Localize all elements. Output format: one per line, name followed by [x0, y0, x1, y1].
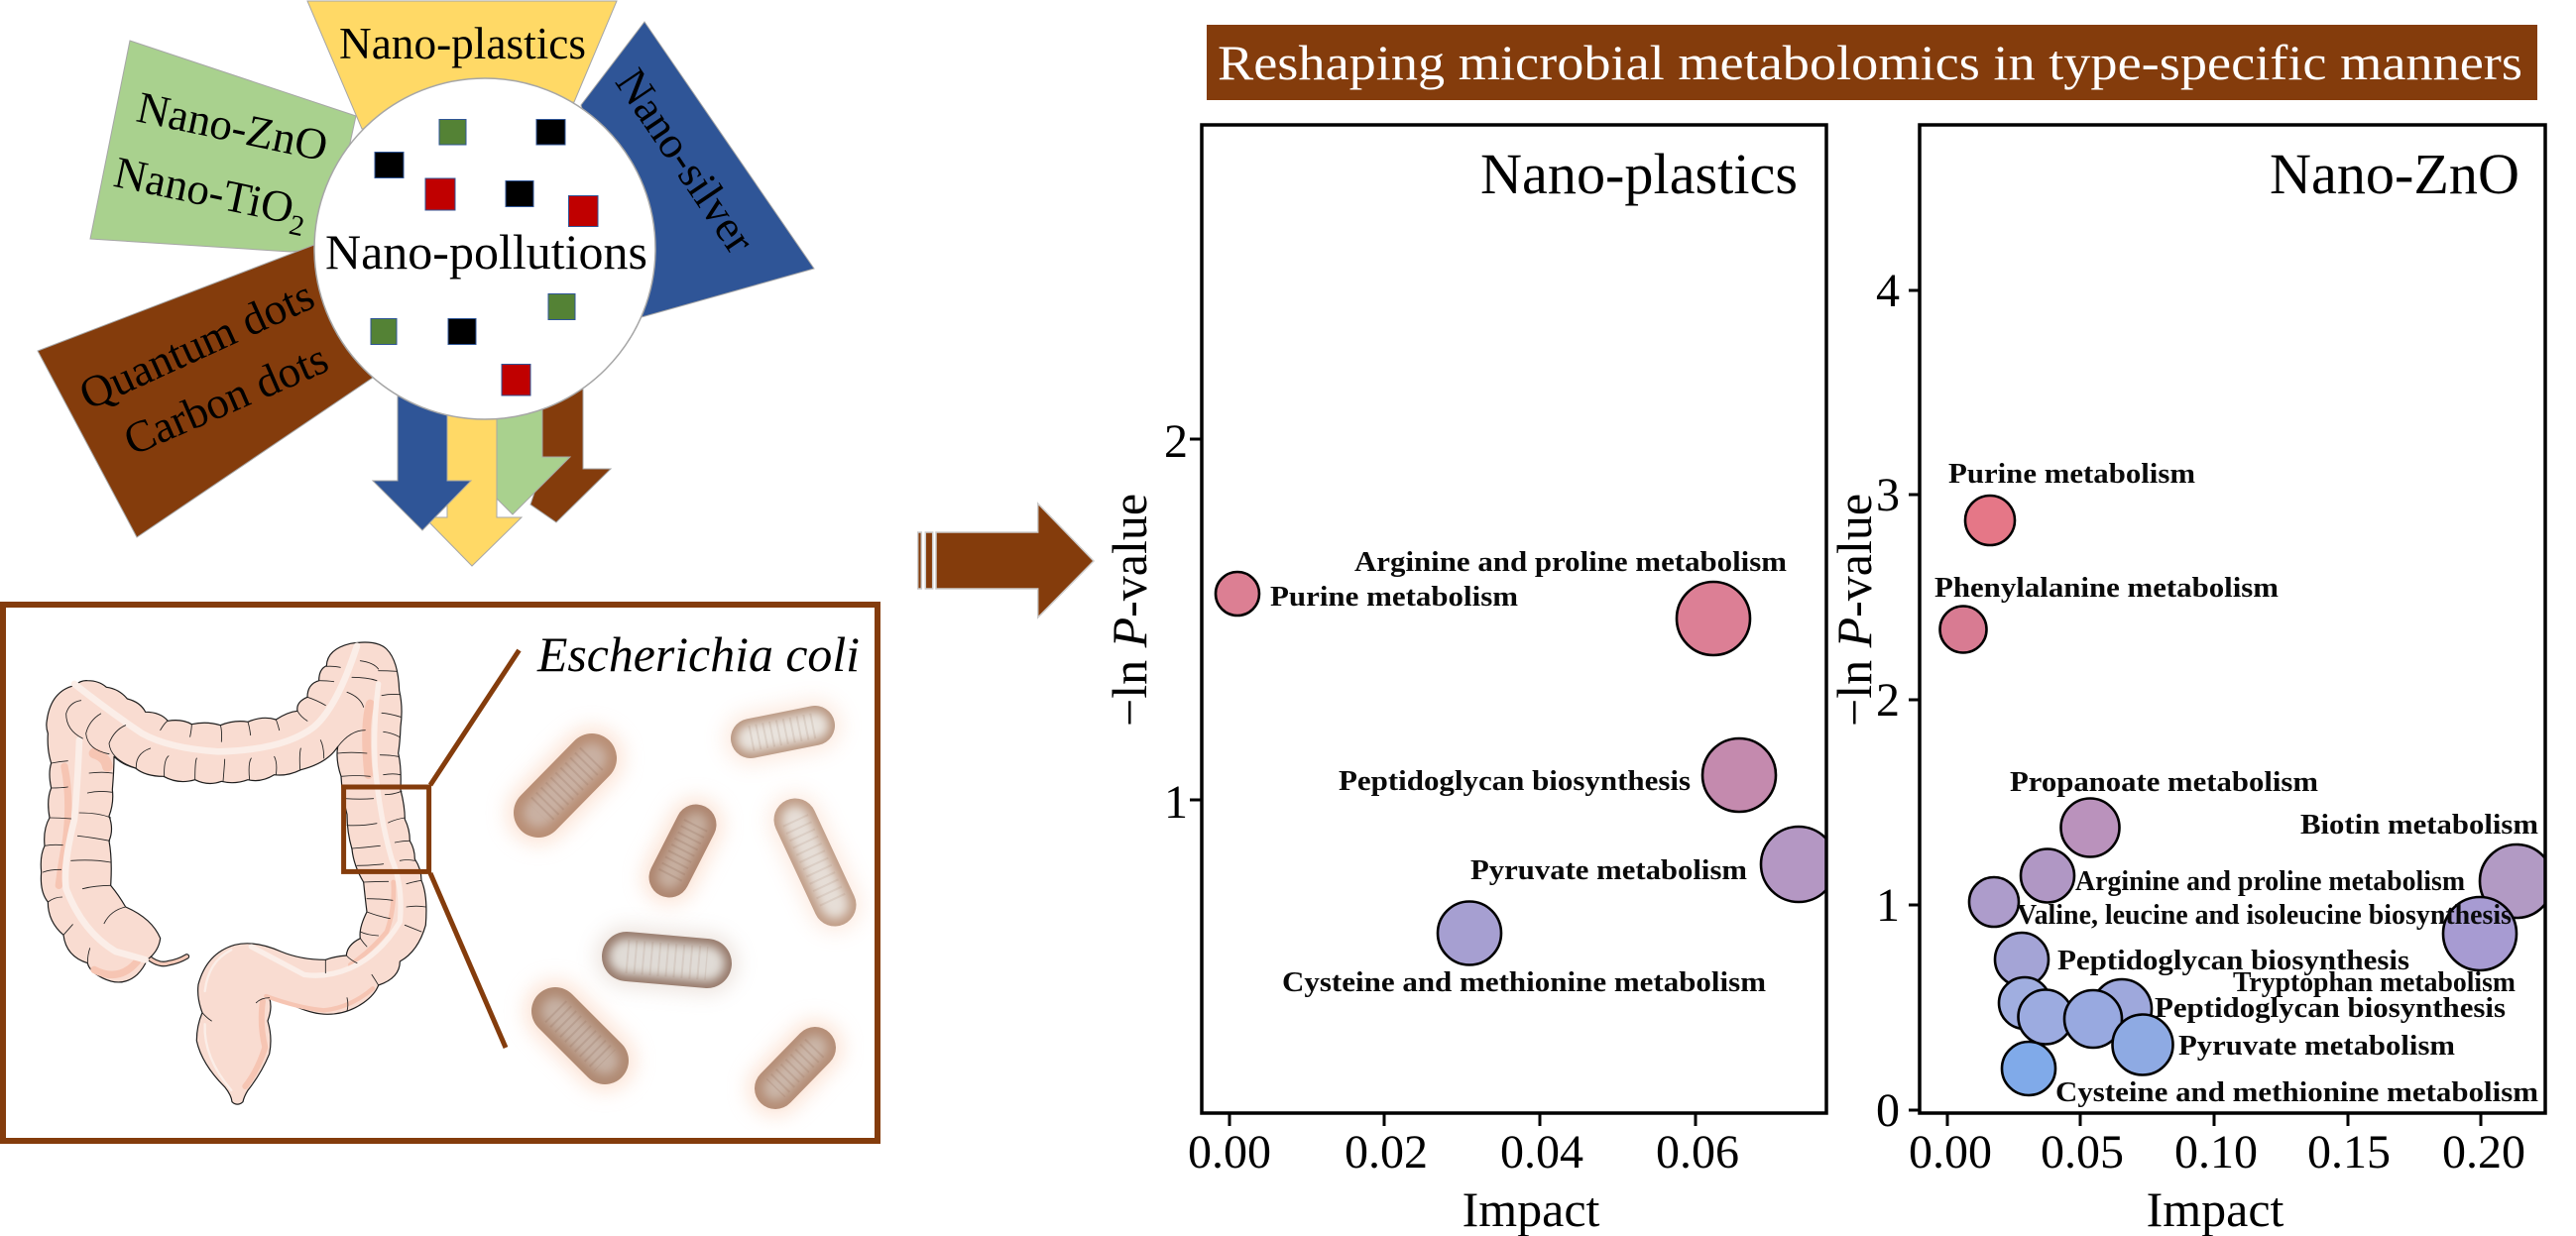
panel heading: Nano-ZnO — [2270, 142, 2519, 206]
x tick labels: 0.15 — [2307, 1126, 2391, 1179]
title banner — [1207, 25, 2537, 100]
x tick labels: 0.00 — [1909, 1126, 1992, 1179]
y tick labels: 2 — [1164, 415, 1188, 468]
bubble labels: Arginine and proline metabolism — [1354, 547, 1787, 578]
x tick labels: 0.04 — [1500, 1126, 1583, 1179]
panel: gut and E. coli — [3, 605, 878, 1141]
zoom line upper — [430, 650, 520, 785]
label: nano-ZnO: Nano-ZnO — [133, 82, 332, 170]
bubble labels: Cysteine and methionine metabolism — [1282, 967, 1766, 998]
x tick labels: 0.02 — [1345, 1126, 1428, 1179]
bubble labels: Purine metabolism — [1948, 459, 2195, 490]
bubble labels — [1934, 459, 2538, 1108]
x tick labels: 0.20 — [2442, 1126, 2525, 1179]
label: nano-silver: Nano-silver — [606, 59, 764, 262]
bubble labels: Cysteine and methionine metabolism — [2055, 1077, 2538, 1108]
label: nano-TiO2: 2 — [287, 209, 307, 243]
petal: nano-silver — [581, 22, 814, 317]
bubble labels: Biotin metabolism — [2300, 810, 2538, 841]
plot frame and ticks — [1909, 125, 2545, 1126]
label: nano-plastics: Nano-plastics — [339, 19, 586, 68]
bacterium 1 — [538, 758, 592, 813]
zoom line lower — [430, 873, 506, 1048]
bubble labels — [1270, 547, 1787, 998]
x tick labels: 0.05 — [2041, 1126, 2124, 1179]
x tick labels: 0.10 — [2174, 1126, 2258, 1179]
y tick labels: 4 — [1876, 265, 1900, 317]
bacterium 5 — [627, 956, 707, 963]
bacterium 2 — [751, 726, 815, 738]
chart: nano-ZnO bubble plot — [1826, 125, 2553, 1236]
arrow: blue down — [373, 297, 471, 530]
bubble labels: Purine metabolism — [1270, 582, 1518, 613]
bacterium 4 — [795, 820, 835, 905]
arrow: to metabolomics — [918, 504, 1094, 618]
x tick labels: 0.06 — [1656, 1126, 1739, 1179]
bubble labels: Pyruvate metabolism — [1470, 855, 1747, 886]
central circle — [314, 78, 655, 419]
bubble labels: Arginine and proline metabolism — [2075, 866, 2465, 897]
label: nano-TiO2: Nano-TiO — [110, 147, 298, 233]
bacterium 7 — [775, 1048, 815, 1088]
x axis title: Impact — [1463, 1181, 1600, 1236]
arrow: brown down — [530, 297, 611, 522]
label: nano-pollutions: Nano-pollutions — [325, 224, 647, 280]
frame — [3, 605, 878, 1141]
label: carbon dots: Carbon dots — [116, 333, 335, 465]
petal: nano-plastics — [307, 1, 617, 129]
y tick labels: 0 — [1876, 1084, 1900, 1137]
y tick labels: 1 — [1876, 879, 1900, 932]
x tick labels — [1188, 1126, 1739, 1179]
arrow: green down — [497, 297, 570, 514]
shading on colon — [59, 704, 394, 1086]
bubbles — [1939, 496, 2553, 1095]
bubble labels: Valine, leucine and isoleucine biosynthesis — [2017, 900, 2512, 931]
bubble labels: Phenylalanine metabolism — [1934, 573, 2279, 604]
arrow: yellow down — [424, 297, 522, 566]
y axis title: −ln P-value — [1826, 494, 1882, 727]
label: quantum dots: Quantum dots — [71, 270, 321, 419]
y tick labels: 1 — [1164, 776, 1188, 829]
y tick labels: 2 — [1876, 674, 1900, 727]
colon outline — [41, 642, 426, 1104]
bubble labels: Pyruvate metabolism — [2178, 1031, 2455, 1062]
white taenia bands on colon — [65, 646, 401, 1090]
bacteria cells — [538, 726, 835, 1088]
label: Escherichia coli: Escherichia coli — [536, 626, 860, 682]
haustra lines on colon — [43, 661, 425, 1021]
chart: nano-plastics bubble plot — [1102, 125, 1836, 1236]
x tick labels: 0.00 — [1188, 1126, 1271, 1179]
bacterium 3 — [669, 825, 696, 877]
x axis title: Impact — [2147, 1181, 2284, 1236]
bubble labels: Peptidoglycan biosynthesis — [2155, 993, 2506, 1024]
x tick labels — [1909, 1126, 2525, 1179]
panel heading: Nano-plastics — [1480, 142, 1798, 206]
petal: quantum and carbon dots — [38, 245, 373, 537]
y axis title: −ln P-value — [1102, 494, 1157, 727]
bubble labels: Peptidoglycan biosynthesis — [1339, 766, 1691, 797]
appendix — [147, 956, 186, 963]
petal: nano-ZnO and nano-TiO2 — [90, 41, 356, 252]
y tick labels — [1164, 415, 1188, 829]
y tick labels — [1876, 265, 1900, 1137]
bubble labels: Peptidoglycan biosynthesis — [2057, 946, 2409, 976]
zoom box on colon — [344, 787, 429, 871]
bubble labels: Tryptophan metabolism — [2233, 967, 2516, 998]
illustration: colon — [41, 642, 426, 1104]
panel: nano-pollution sources diagram — [38, 1, 814, 566]
bacterium 6 — [555, 1011, 605, 1061]
bubble labels: Propanoate metabolism — [2010, 767, 2318, 798]
y tick labels: 3 — [1876, 469, 1900, 521]
nano particles — [371, 119, 598, 395]
title banner: Reshaping microbial metabolomics in type-specific manners — [1218, 35, 2522, 90]
bubbles — [1216, 572, 1836, 965]
plot frame and ticks — [1190, 125, 1826, 1126]
